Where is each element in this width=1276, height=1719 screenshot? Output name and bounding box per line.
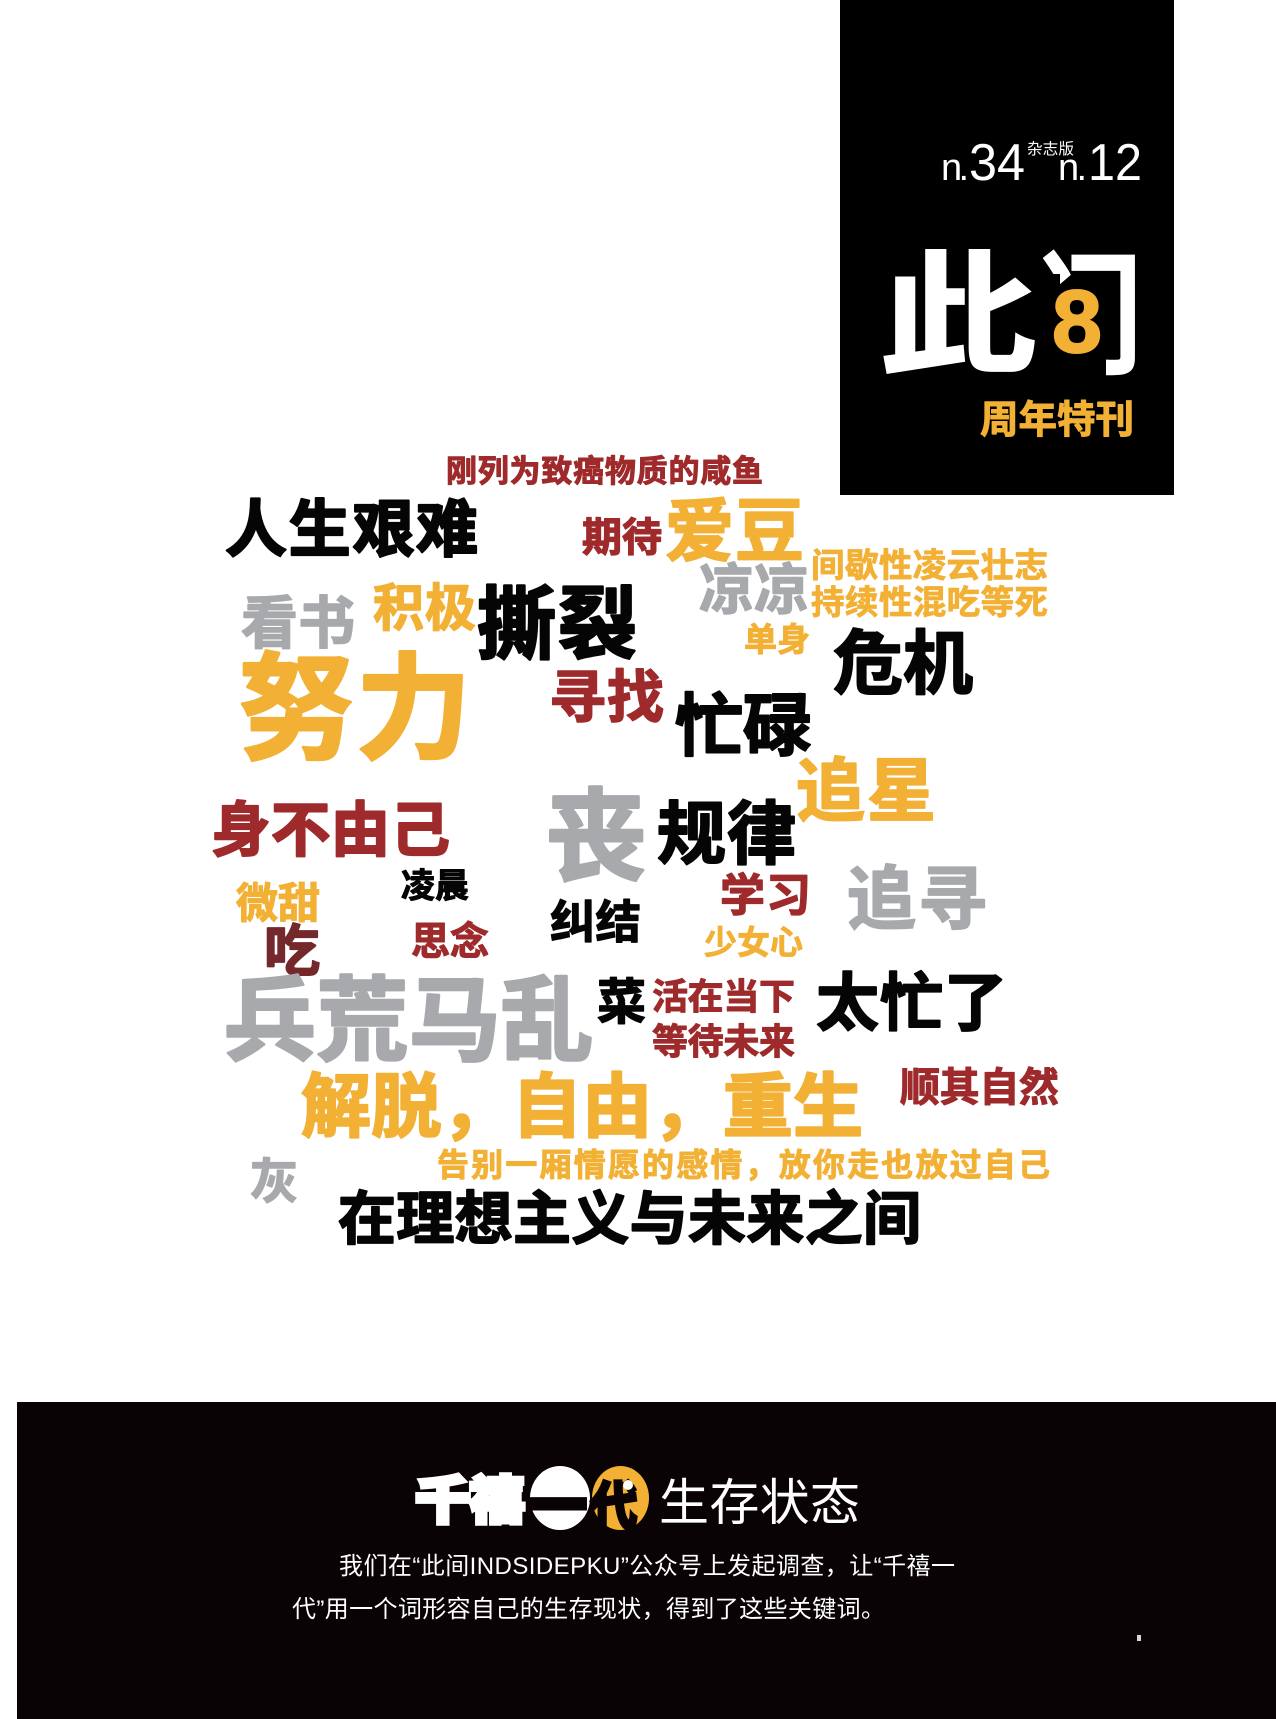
logo: 此间 8: 门 — [1031, 244, 1143, 391]
word: 人生艰难: 人生艰难 — [225, 496, 478, 565]
heading text: 生存状态: 生存状态 — [659, 1475, 860, 1531]
issue numbers: n. — [1058, 147, 1087, 189]
issue numbers: 12 — [1088, 134, 1142, 192]
word: 在理想主义与未来之间: 在理想主义与未来之间 — [338, 1187, 921, 1252]
word: 期待: 期待 — [582, 516, 662, 560]
panel: bottom intro band — [17, 1402, 1276, 1719]
word cloud — [211, 454, 1059, 1252]
word: 思念: 思念 — [411, 921, 489, 964]
word: 等待未来: 等待未来 — [652, 1021, 795, 1062]
logo: 此间 8: 此 — [879, 243, 1037, 390]
word: 凉凉: 凉凉 — [699, 559, 809, 621]
word: 吃: 吃 — [264, 920, 320, 983]
word: 活在当下: 活在当下 — [652, 976, 795, 1017]
word: 刚列为致癌物质的咸鱼: 刚列为致癌物质的咸鱼 — [446, 454, 763, 489]
logo: 此间 8: 8 — [1050, 275, 1104, 380]
subtitle: anniversary issue: 周年特刊 — [980, 399, 1134, 442]
word: 告别一厢情愿的感情，放你走也放过自己: 告别一厢情愿的感情，放你走也放过自己 — [437, 1147, 1050, 1183]
word: 危机: 危机 — [833, 625, 973, 703]
intro paragraph — [292, 1553, 955, 1623]
word: 凌晨: 凌晨 — [401, 868, 469, 906]
word: 间歇性凌云壮志: 间歇性凌云壮志 — [811, 548, 1048, 585]
word: 撕裂: 撕裂 — [477, 580, 637, 669]
badge: 一 in white ellipse: 一 — [530, 1475, 586, 1538]
word: 追寻: 追寻 — [847, 861, 987, 938]
word: 纠结: 纠结 — [550, 897, 641, 948]
word: 看书: 看书 — [241, 592, 355, 656]
word: 努力: 努力 — [239, 646, 471, 774]
word: 爱豆: 爱豆 — [665, 493, 804, 570]
word: 身不由己: 身不由己 — [211, 797, 450, 864]
issue numbers: n. — [941, 147, 969, 189]
word: 顺其自然: 顺其自然 — [900, 1066, 1059, 1110]
word: 菜: 菜 — [597, 976, 646, 1030]
word: 规律: 规律 — [657, 796, 796, 873]
word: 学习: 学习 — [720, 870, 811, 921]
intro paragraph: 我们在“此间INDSIDEPKU”公众号上发起调查，让“千禧一 — [339, 1553, 955, 1580]
heading: 千禧一代生存状态 — [416, 1466, 860, 1538]
word: 寻找: 寻找 — [549, 666, 664, 730]
issue numbers: 杂志版 — [1027, 140, 1074, 158]
word: 太忙了: 太忙了 — [816, 969, 1007, 1039]
stylised 千禧: 千禧 — [416, 1473, 524, 1529]
logo: 此间 8 — [879, 243, 1143, 391]
word: 积极: 积极 — [373, 580, 476, 637]
panel: issue cover block — [840, 0, 1174, 495]
word: 微甜: 微甜 — [236, 880, 320, 927]
word: 兵荒马乱: 兵荒马乱 — [224, 971, 593, 1073]
issue numbers: 34 — [969, 134, 1025, 192]
word: 单身: 单身 — [744, 621, 810, 658]
word: 忙碌: 忙碌 — [675, 689, 811, 765]
word: 少女心: 少女心 — [704, 924, 803, 961]
word: 灰: 灰 — [250, 1156, 298, 1209]
word: 持续性混吃等死: 持续性混吃等死 — [811, 585, 1048, 622]
word: 追星: 追星 — [796, 753, 936, 830]
word: 丧: 丧 — [546, 782, 646, 894]
issue numbers — [941, 134, 1142, 192]
intro paragraph: 代”用一个词形容自己的生存现状，得到了这些关键词。 — [292, 1596, 885, 1623]
badge: 代 on gold circle: 代 — [591, 1479, 637, 1537]
word: 解脱，自由，重生: 解脱，自由，重生 — [301, 1068, 863, 1146]
